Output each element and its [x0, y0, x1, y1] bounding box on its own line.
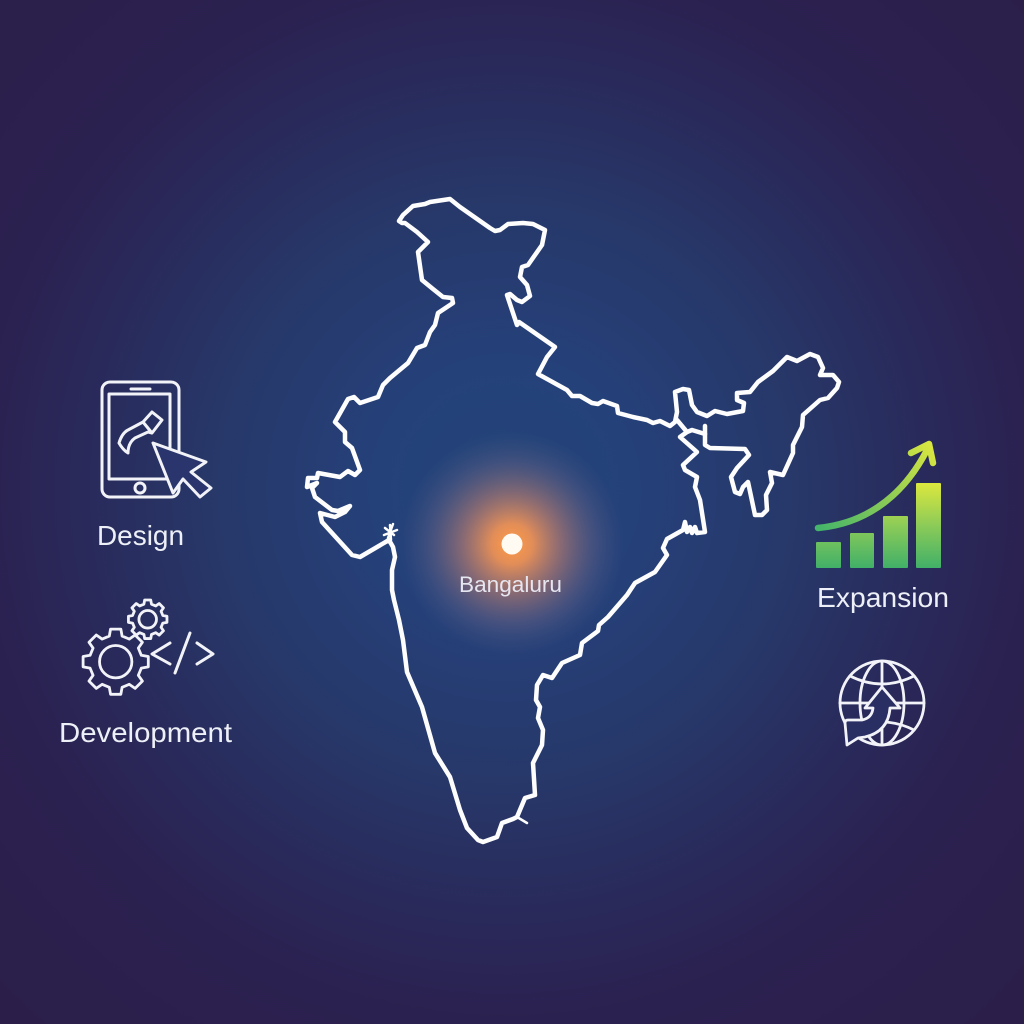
arrow: growth curve	[818, 444, 933, 528]
icon: code brackets	[152, 633, 213, 673]
label: Development: Development	[59, 717, 232, 748]
marker: Bangaluru dot	[502, 534, 522, 554]
icon: large gear	[83, 629, 148, 694]
icon: gears and code	[83, 600, 213, 694]
icon: globe with arrow	[840, 661, 924, 745]
icon: small gear	[128, 600, 167, 639]
icon: tablet with pen and cursor	[102, 382, 211, 497]
map: India outline	[307, 199, 839, 842]
label: Expansion: Expansion	[817, 582, 949, 613]
chart: growth bars	[816, 483, 941, 568]
Bangaluru glow	[400, 432, 624, 656]
label: Bangaluru: Bangaluru	[459, 572, 562, 597]
label: Design: Design	[97, 520, 184, 551]
